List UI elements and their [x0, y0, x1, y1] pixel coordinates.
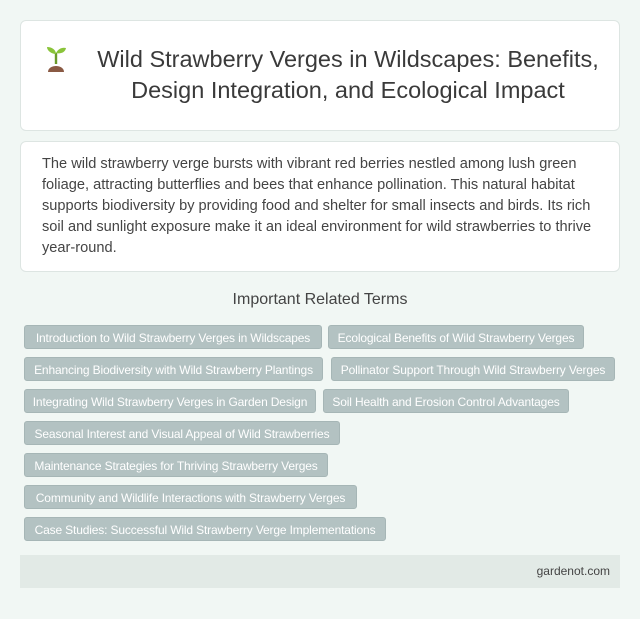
title: Wild Strawberry Verges in Wildscapes: Benefits, Design Integration, and Ecological Impact — [97, 46, 599, 103]
tag — [24, 389, 316, 413]
header card — [20, 20, 620, 131]
tag — [24, 421, 340, 445]
tag: Community and Wildlife Interactions with Strawberry Verges — [36, 491, 345, 505]
tag — [323, 389, 569, 413]
footer — [20, 555, 620, 588]
tag — [331, 357, 615, 381]
tag: Soil Health and Erosion Control Advantages — [332, 395, 560, 409]
tag: Introduction to Wild Strawberry Verges in Wildscapes — [36, 331, 310, 345]
icon: sprout — [47, 47, 66, 72]
tag: Enhancing Biodiversity with Wild Strawberry Plantings — [34, 363, 313, 377]
tag — [24, 517, 386, 541]
tag: Seasonal Interest and Visual Appeal of Wild Strawberries — [35, 427, 329, 441]
tag: Pollinator Support Through Wild Strawberry Verges — [341, 363, 605, 377]
tag — [24, 325, 322, 349]
tag: Case Studies: Successful Wild Strawberry Verge Implementations — [35, 523, 375, 537]
tag — [24, 453, 328, 477]
tag — [24, 485, 357, 509]
tag: Ecological Benefits of Wild Strawberry Verges — [338, 331, 574, 345]
description text: The wild strawberry verge bursts with vibrant red berries nestled among lush green foliage, attracting butterflies and bees that enhance pollination. This natural habitat supports biodiversity by providing food and shelter for small insects and birds. Its rich soil and sunlight exposure make it an ideal environment for wild strawberries to thrive year-round. — [42, 156, 591, 256]
tag — [24, 357, 323, 381]
heading: important related terms: Important Related Terms — [233, 291, 407, 308]
description card — [20, 141, 620, 272]
tag: Maintenance Strategies for Thriving Strawberry Verges — [34, 459, 318, 473]
footer text: gardenot.com — [537, 564, 610, 578]
tag: Integrating Wild Strawberry Verges in Garden Design — [33, 395, 307, 409]
tag — [328, 325, 584, 349]
